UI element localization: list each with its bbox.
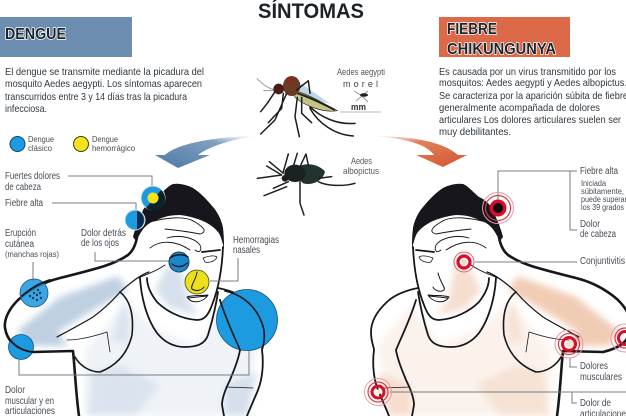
dengue symptom labels: Erupción xyxy=(5,228,36,239)
panel: dengue heading xyxy=(0,17,132,57)
panel: chikungunya heading: CHIKUNGUNYA xyxy=(447,41,556,58)
chikungunya symptom labels: Dolores xyxy=(580,361,608,372)
dengue symptom labels: Fuertes dolores xyxy=(5,171,60,182)
icon: Aedes aegypti mosquito xyxy=(257,76,355,137)
icon: muscle pain target xyxy=(555,330,583,358)
icon: mosquito size scale: mm xyxy=(351,102,366,113)
arrow: orange to chikungunya xyxy=(368,136,467,167)
text: dengue description xyxy=(5,66,204,115)
dengue symptom labels: (manchas rojas) xyxy=(5,250,59,259)
chikungunya symptom labels: Fiebre alta xyxy=(580,166,618,177)
icon: headache marker xyxy=(141,186,165,211)
chikungunya symptom labels: Iniciada xyxy=(581,179,606,188)
label: Aedes albopictus: Aedes xyxy=(351,156,372,167)
label: Aedes albopictus: albopictus xyxy=(343,166,379,177)
text: dengue description: infecciosa. xyxy=(5,103,47,115)
text: dengue description: mosquito Aedes aegypti. Los síntomas aparecen xyxy=(5,78,202,90)
chikungunya symptom labels: Dolor de xyxy=(580,398,611,409)
text: chikungunya description xyxy=(439,66,626,138)
icon: Aedes albopictus mosquito xyxy=(257,153,355,215)
icon: fever marker xyxy=(125,210,145,230)
icon: rash marker xyxy=(20,279,50,307)
icon: joint pain marker, elbow xyxy=(8,334,34,360)
panel: dengue heading: DENGUE xyxy=(5,26,66,43)
legend: Dengue xyxy=(28,135,55,144)
figure: chikungunya man xyxy=(371,184,626,416)
icon: elbow target xyxy=(611,324,626,352)
text: dengue description: transcurridos entre 3 y 14 días tras la picadura xyxy=(5,91,187,103)
dengue symptom labels: Hemorragias xyxy=(233,235,279,246)
icon: mosquito size scale xyxy=(340,91,381,113)
icon: fever and headache target xyxy=(482,192,514,224)
panel: chikungunya heading: FIEBRE xyxy=(447,21,497,38)
dengue symptom labels xyxy=(5,171,279,416)
label: Aedes aegypti: Aedes aegypti xyxy=(337,67,385,78)
legend: hemorrágico xyxy=(92,144,136,153)
icon: muscle pain marker, shoulder xyxy=(216,290,278,350)
chikungunya symptom labels: súbitamente, xyxy=(581,187,624,196)
arrow: blue to dengue xyxy=(155,136,254,168)
label: Aedes albopictus xyxy=(343,156,379,177)
label: Aedes aegypti: m o r e l xyxy=(343,79,378,89)
legend xyxy=(10,135,136,153)
chikungunya symptom labels: Dolor xyxy=(580,219,601,230)
dengue symptom labels: de los ojos xyxy=(81,238,119,249)
text: dengue description: El dengue se transmite mediante la picadura del xyxy=(5,66,204,78)
dengue symptom labels: de cabeza xyxy=(5,182,41,193)
chikungunya symptom labels: de cabeza xyxy=(580,229,616,240)
icon: eye pain marker xyxy=(169,252,189,272)
text: chikungunya description: generalmente acompañada de dolores xyxy=(439,102,600,114)
dengue symptom labels: nasales xyxy=(233,245,260,256)
title: SÍNTOMAS xyxy=(258,0,364,23)
dengue symptom labels: cutánea xyxy=(5,239,34,250)
figure: dengue man xyxy=(5,184,265,416)
chikungunya symptom labels xyxy=(580,166,626,416)
dengue leader lines xyxy=(19,176,249,375)
dengue symptom labels: muscular y en xyxy=(5,396,54,407)
text: chikungunya description: muy debilitantes. xyxy=(439,126,511,138)
panel: chikungunya heading xyxy=(439,17,570,58)
dengue symptom labels: Dolor xyxy=(5,385,26,396)
chikungunya leader lines xyxy=(390,171,626,403)
icon: arm joint target xyxy=(364,378,392,406)
dengue symptom labels: Dolor detrás xyxy=(81,228,126,239)
dengue symptom labels: Fiebre alta xyxy=(5,198,43,209)
icon: nose bleed marker xyxy=(185,270,209,294)
icon: conjunctivitis target xyxy=(454,252,474,272)
legend: Dengue xyxy=(92,135,119,144)
legend: clásico xyxy=(28,144,53,153)
label: Aedes aegypti xyxy=(337,67,385,89)
